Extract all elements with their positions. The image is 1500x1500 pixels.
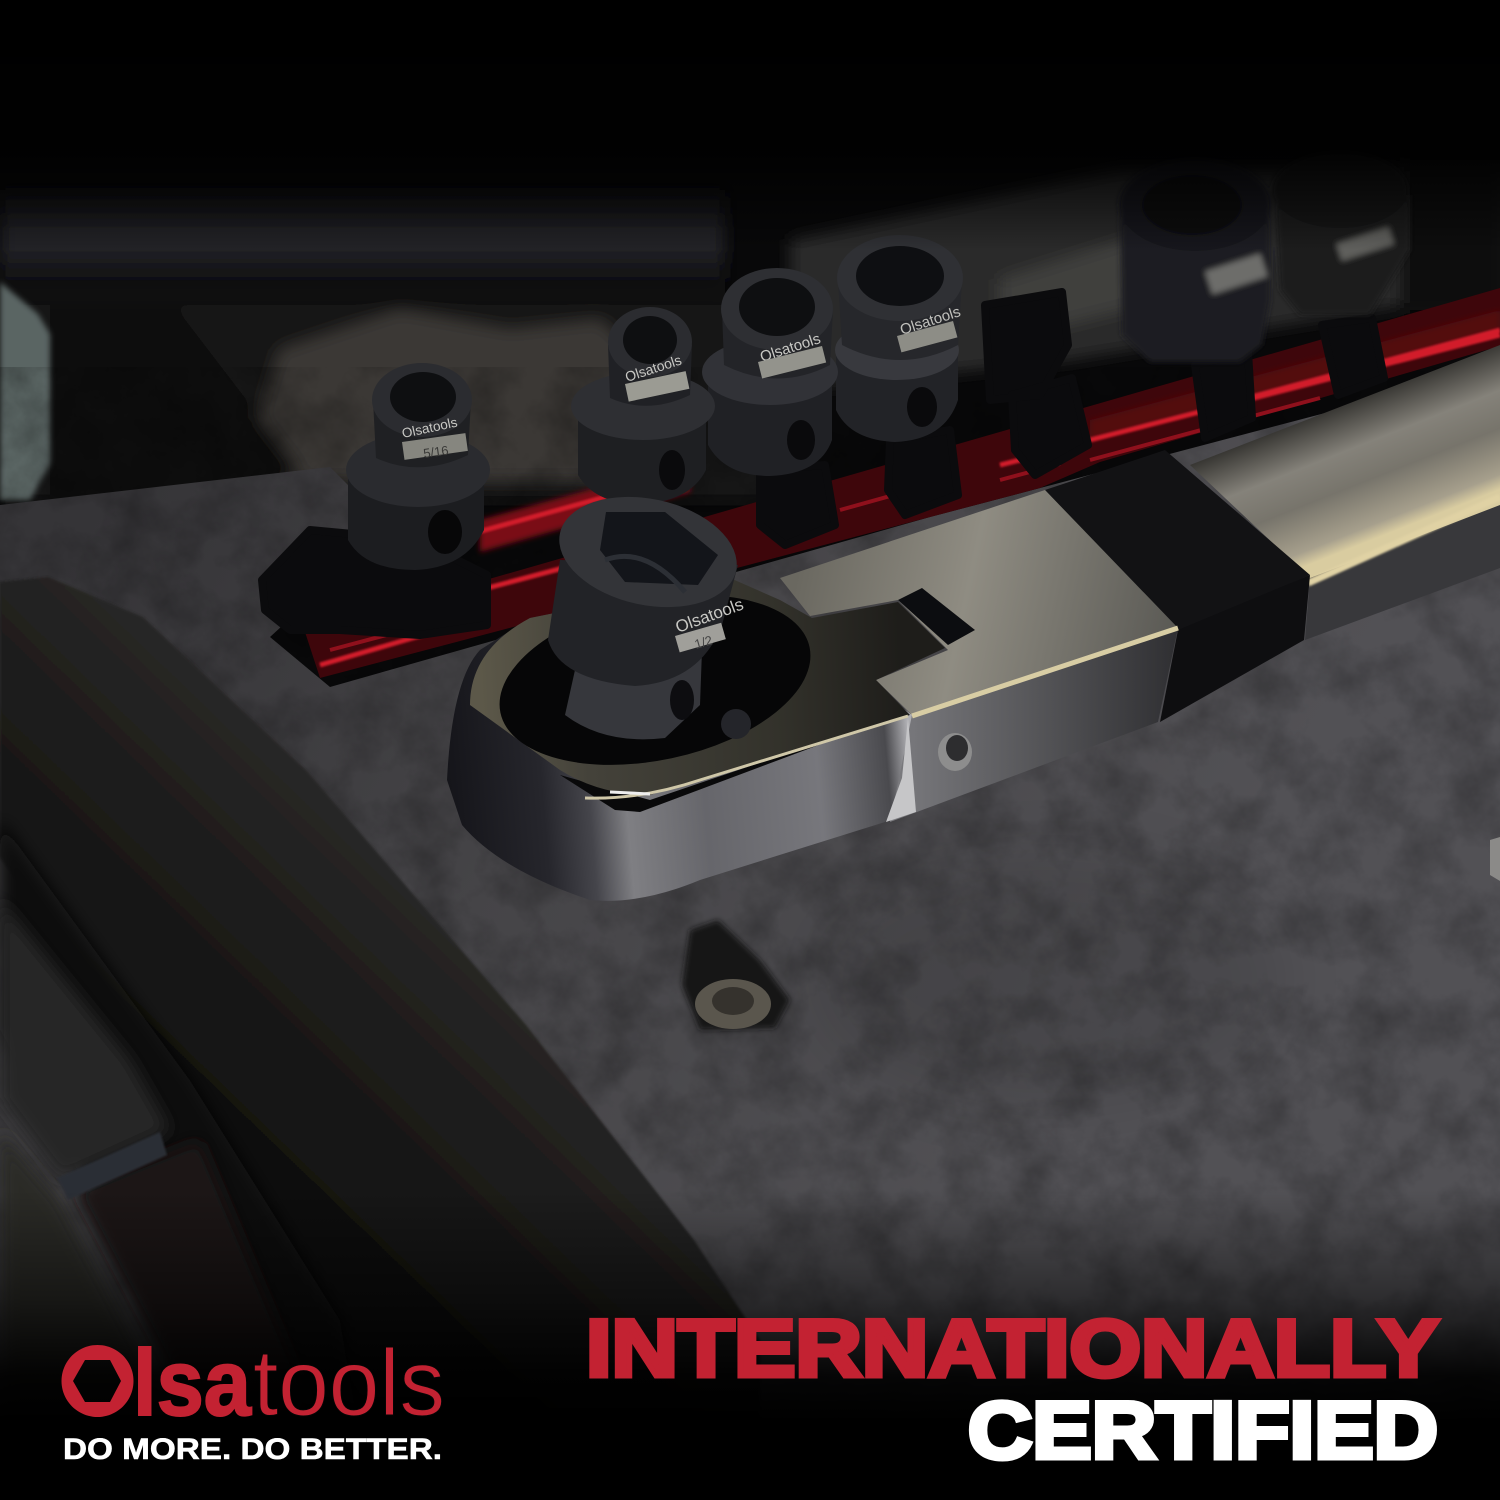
head top plate: [470, 578, 945, 795]
black socket recess: [500, 597, 810, 765]
red socket rail: [305, 288, 1500, 678]
small clip at right edge: [1490, 837, 1500, 881]
top darkness gradient: [0, 0, 1500, 250]
headline: INTERNATIONALLY: INTERNATIONALLY: [586, 1304, 1439, 1394]
front socket 1/2: 1/2: [693, 632, 714, 652]
wrench chrome head: [447, 614, 912, 901]
blue strip on body: [57, 1132, 167, 1200]
wrench handle tube: [1190, 345, 1500, 640]
slot in brushed plate: [898, 588, 975, 645]
socket 1: Olsatools: [401, 415, 459, 441]
adjustment screw hole: [938, 733, 972, 771]
torque wrench: [447, 345, 1500, 901]
wrench side square chrome: [890, 628, 1178, 822]
front socket 1/2: Olsatools: [673, 595, 746, 637]
grey engine cover mat: [0, 414, 1500, 1370]
socket 4: Olsatools: [898, 303, 963, 339]
socket 4: [835, 235, 963, 442]
head shadow wedge: [560, 744, 820, 812]
retaining screw: [721, 709, 751, 739]
logo hex O: [62, 1345, 134, 1417]
socket 2: [571, 307, 715, 504]
headline: CERTIFIED: CERTIFIED: [968, 1386, 1438, 1476]
logo: Olsatools: [62, 1330, 445, 1435]
front socket 1/2: [548, 481, 747, 739]
logo tagline: DO MORE. DO BETTER.: [63, 1433, 442, 1466]
dark hose across the left: [0, 576, 760, 1366]
socket 1: 5/16: [422, 443, 449, 461]
rail clips: [262, 292, 1384, 635]
engine hoses and shadow background: [0, 176, 1410, 496]
blurred back sockets: [1118, 178, 1396, 363]
bottom darkness gradient: [0, 1190, 1500, 1500]
logo bold lsa: lsa: [133, 1330, 252, 1435]
brushed steel top plate: [780, 490, 1178, 715]
socket 3: Olsatools: [758, 330, 823, 366]
mounting bolt: [682, 920, 790, 1030]
logo light tools: tools: [253, 1330, 445, 1435]
coolant bottle: [0, 282, 50, 500]
socket 3: [702, 268, 838, 476]
socket 2: Olsatools: [623, 352, 683, 385]
gully shadow: [0, 828, 194, 1189]
lower-left ribbed body: [0, 900, 170, 1180]
black sleeve: [1045, 450, 1310, 722]
socket 1: [346, 363, 490, 570]
